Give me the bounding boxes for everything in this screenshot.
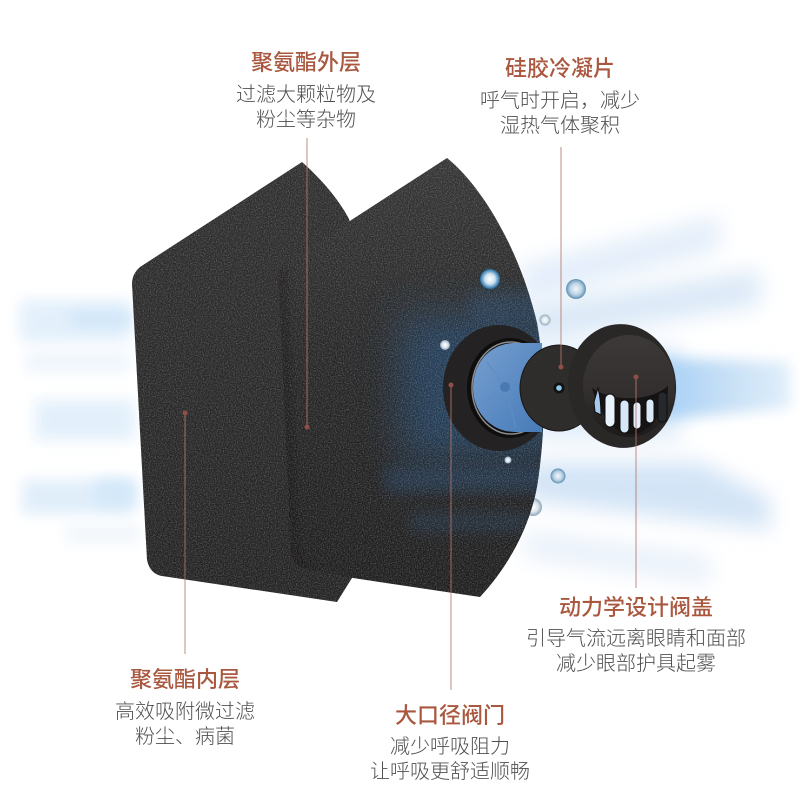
large valve ring and lens	[443, 325, 542, 451]
label: vent cover	[526, 595, 746, 675]
water droplets	[440, 269, 586, 484]
leader dots	[182, 364, 638, 430]
label: silicone sheet: 硅胶冷凝片	[505, 56, 615, 81]
mask and valve illustration	[16, 138, 794, 690]
label: outer layer: 聚氨酯外层	[251, 50, 361, 75]
airflow left	[20, 300, 140, 544]
label: valve: 减少呼吸阻力	[390, 736, 510, 758]
label: inner layer: 高效吸附微过滤	[115, 701, 255, 723]
vent slots	[594, 388, 667, 433]
vent cover	[562, 319, 682, 453]
label: vent cover: 引导气流远离眼睛和面部	[526, 628, 746, 650]
leader lines	[185, 138, 636, 690]
label: outer layer	[236, 50, 376, 131]
label: silicone sheet	[480, 56, 640, 137]
silicone condensation disc	[520, 345, 598, 431]
label: valve: 大口径阀门	[395, 703, 505, 728]
label: silicone sheet: 湿热气体聚积	[500, 115, 620, 137]
label: silicone sheet: 呼气时开启，减少	[480, 90, 640, 112]
label: outer layer: 粉尘等杂物	[256, 109, 356, 131]
label: inner layer	[115, 667, 255, 748]
label: inner layer: 粉尘、病菌	[135, 726, 235, 748]
front mask layer	[275, 155, 560, 605]
label: vent cover: 动力学设计阀盖	[559, 595, 713, 620]
label: valve: 让呼吸更舒适顺畅	[370, 761, 530, 783]
label: inner layer: 聚氨酯内层	[130, 667, 240, 692]
airflow right	[520, 215, 790, 584]
label: valve	[370, 703, 530, 783]
droplet behind mask edge	[524, 498, 542, 516]
label: outer layer: 过滤大颗粒物及	[236, 84, 376, 106]
label: vent cover: 减少眼部护具起雾	[556, 653, 716, 675]
back mask layer	[132, 162, 352, 602]
